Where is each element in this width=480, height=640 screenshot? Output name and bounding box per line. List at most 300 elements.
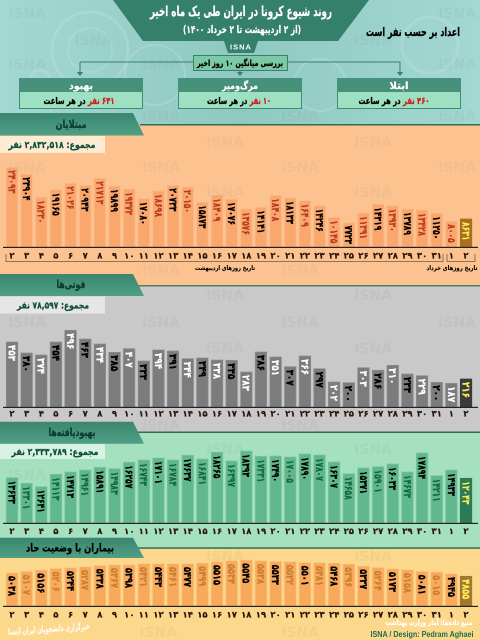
bar chart: infected bbox=[3, 167, 478, 248]
watermarks: ISNA bbox=[354, 442, 392, 458]
watermarks: ISNA bbox=[8, 468, 46, 484]
day labels: critical patients bbox=[9, 610, 469, 620]
bar chart: critical patients: ۵۵۳۳ bbox=[269, 565, 281, 585]
bar chart: critical patients: ۵۳۶۷ bbox=[108, 568, 120, 588]
card: infection: ابتلا bbox=[390, 81, 408, 92]
bar chart: recovered: ۱۶۲۵۷ bbox=[123, 465, 135, 489]
day labels: infected: ۲۱ bbox=[285, 252, 295, 262]
bar chart: infected: ۸۶۳۱ bbox=[459, 222, 471, 240]
bar chart: deaths: ۲۰۰ bbox=[342, 386, 354, 402]
day labels: deaths: ۲ bbox=[9, 410, 15, 420]
card: deaths: مرگ‌ومیر bbox=[221, 79, 258, 92]
bar chart: recovered: ۱۴۶۷۳ bbox=[401, 475, 413, 498]
bar chart: recovered: ۱۴۲۱۱ bbox=[430, 479, 442, 502]
day labels: deaths: ۲ bbox=[463, 410, 469, 420]
bar chart: critical patients: ۵۲۴۴ bbox=[64, 571, 76, 591]
card: deaths: ۱۰ نفر در هر ساعت bbox=[207, 96, 271, 107]
bar chart: deaths: ۳۸۵ bbox=[108, 355, 120, 372]
bar chart: recovered: ۱۴۹۶۱ bbox=[79, 473, 91, 496]
bar chart: recovered: ۱۷۶۳۷ bbox=[181, 458, 193, 482]
bar chart: infected: ۲۰۱۵۰ bbox=[181, 190, 193, 213]
bar chart: deaths: ۳۰۳ bbox=[357, 371, 369, 387]
day labels: critical patients: ۶ bbox=[68, 610, 73, 620]
day labels: critical patients: ۵ bbox=[53, 610, 59, 620]
bar chart: deaths: ۲۸۶ bbox=[372, 373, 384, 389]
watermarks: ISNA bbox=[206, 288, 244, 304]
bar chart: recovered: ۱۶۳۹۷ bbox=[225, 464, 237, 487]
bar chart: deaths: ۴۰۷ bbox=[123, 352, 135, 368]
bar chart: infected: ۱۵۸۷۳ bbox=[196, 205, 208, 229]
day labels: critical patients: ۱۵ bbox=[197, 610, 208, 620]
day labels: deaths: ۲۲ bbox=[300, 410, 311, 420]
day labels: critical patients: ۲ bbox=[463, 610, 469, 620]
day labels: deaths: ۷ bbox=[83, 410, 89, 420]
bar chart: infected: ۲۱۷۱۳ bbox=[93, 181, 105, 205]
bar chart: deaths: ۳۸۰ bbox=[20, 356, 32, 372]
day labels: infected: ۲۶ bbox=[358, 252, 369, 262]
bar chart: critical patients: ۵۵۱۵ bbox=[210, 565, 222, 585]
day labels: recovered: ۲ bbox=[463, 527, 469, 537]
bar chart: recovered: ۱۲۶۴۱ bbox=[35, 490, 47, 513]
card: infection: ۴۶۰ نفر در هر ساعت bbox=[358, 96, 429, 107]
day labels: critical patients: ۱۹ bbox=[256, 610, 267, 620]
day labels: infected: ۱۹ bbox=[256, 252, 267, 262]
day labels: deaths: ۲۶ bbox=[358, 410, 369, 420]
bar chart: infected: ۷۷۲۳ bbox=[342, 226, 354, 244]
day labels: deaths: ۴ bbox=[39, 410, 44, 420]
day labels: deaths: ۳۱ bbox=[432, 410, 442, 420]
bar chart: deaths: ۲۱۶ bbox=[459, 382, 471, 398]
bar chart: infected: ۱۳۵۷۶ bbox=[240, 212, 252, 235]
day labels: infected: ۲۲ bbox=[300, 252, 311, 262]
bar chart: deaths: ۳۵۱ bbox=[269, 360, 281, 376]
panel: deaths bbox=[0, 274, 480, 432]
bar chart: critical patients: ۵۵۰۱ bbox=[298, 566, 310, 586]
day labels: infected: ۲۰ bbox=[270, 252, 281, 262]
bar chart: critical patients: ۵۴۹۹ bbox=[196, 566, 208, 587]
day labels: deaths: ۱۹ bbox=[256, 410, 267, 420]
header background bbox=[0, 0, 480, 126]
bar chart: recovered: ۱۳۶۳۳ bbox=[5, 481, 17, 504]
bar chart: infected: ۱۹۳۷۲ bbox=[123, 192, 135, 215]
watermarks: ISNA bbox=[438, 6, 476, 22]
bar chart: infected: ۲۰۷۳۳ bbox=[166, 188, 178, 212]
day labels: critical patients: ۲۱ bbox=[285, 610, 295, 620]
bar chart: critical patients: ۵۳۹۸ bbox=[123, 568, 135, 588]
day labels: infected: ۱۶ bbox=[212, 252, 222, 262]
watermarks: ISNA bbox=[206, 185, 244, 201]
bar chart: critical patients: ۵۰۱۵ bbox=[430, 575, 442, 596]
bar chart: critical patients: ۵۴۶۸ bbox=[328, 566, 340, 587]
day labels: critical patients: ۷ bbox=[83, 610, 89, 620]
day labels: recovered: ۱۳ bbox=[168, 527, 179, 537]
bar chart: recovered: ۱۴۱۱۳ bbox=[49, 477, 61, 501]
watermarks: ISNA bbox=[438, 57, 476, 73]
bar chart: deaths: ۳۳۵ bbox=[225, 363, 237, 380]
day labels: infected: ۲۴ bbox=[329, 252, 339, 262]
day labels: infected bbox=[9, 252, 469, 262]
bar chart: infected: ۱۶۴۰۹ bbox=[298, 204, 310, 227]
total: deaths: مجموع: ۷۸,۵۹۷ نفر bbox=[16, 300, 89, 312]
bar chart: deaths: ۲۹۷ bbox=[313, 372, 325, 388]
bar chart: recovered: ۱۷۸۹۰ bbox=[298, 457, 310, 480]
bar chart: infected: ۱۱۳۹۱ bbox=[357, 216, 369, 239]
panel: critical patients bbox=[0, 538, 480, 640]
bar chart: recovered: ۱۴۹۸۳ bbox=[108, 472, 120, 495]
day labels: deaths: ۱۳ bbox=[168, 410, 179, 420]
bar chart: critical patients: ۵۲۰۶ bbox=[49, 572, 61, 592]
day labels: deaths: ۲۱ bbox=[285, 410, 295, 420]
bar chart: deaths: ۳۹۱ bbox=[166, 354, 178, 370]
bar chart: recovered: ۱۶۷۴۳ bbox=[137, 463, 149, 486]
day labels: critical patients: ۱۶ bbox=[212, 610, 222, 620]
panel: recovered bbox=[0, 422, 480, 548]
day labels: infected: ۲۸ bbox=[388, 252, 399, 262]
day labels: deaths: ۱۱ bbox=[139, 410, 149, 420]
day labels: recovered: ۱۰ bbox=[124, 527, 134, 537]
total: deaths bbox=[0, 296, 105, 314]
day labels: infected: ۲۳ bbox=[314, 252, 325, 262]
bar chart: critical patients: ۵۳۳۷ bbox=[357, 569, 369, 590]
day labels: deaths: ۱۴ bbox=[183, 410, 193, 420]
bar chart: infected: ۱۸۴۰۸ bbox=[269, 198, 281, 222]
bar chart: critical patients: ۵۴۶۱ bbox=[166, 567, 178, 587]
logo: ISNA Persian: خبرگزاری دانشجویان ایران ایسنا bbox=[7, 620, 90, 638]
bar chart: infected: ۱۹۱۶۵ bbox=[49, 193, 61, 216]
bar chart: critical patients: ۵۱۰۷ bbox=[20, 575, 32, 595]
day labels: recovered: ۱ bbox=[449, 527, 454, 537]
day labels: infected: ۱۵ bbox=[197, 252, 208, 262]
watermarks: ISNA bbox=[281, 315, 319, 331]
total: infected bbox=[0, 136, 105, 153]
day labels: infected: ۱۴ bbox=[183, 252, 193, 262]
day labels: recovered: ۲۹ bbox=[402, 527, 413, 537]
card: recovery: بهبود bbox=[69, 81, 93, 92]
watermarks: ISNA bbox=[354, 185, 392, 201]
watermarks: ISNA bbox=[8, 160, 46, 176]
day labels: infected: ۲ bbox=[463, 252, 469, 262]
bar chart: deaths: ۳۴۹ bbox=[196, 361, 208, 377]
total: recovered bbox=[0, 444, 105, 459]
bar chart: recovered: ۱۵۳۷۱ bbox=[357, 471, 369, 494]
day labels: infected: ۲۷ bbox=[373, 252, 384, 262]
month brackets bbox=[6, 254, 475, 262]
day labels: critical patients: ۲۰ bbox=[270, 610, 281, 620]
day labels: critical patients: ۱۷ bbox=[227, 610, 238, 620]
bar chart: infected: ۱۳۷۸۹ bbox=[401, 212, 413, 235]
watermarks: ISNA bbox=[281, 468, 319, 484]
day labels: recovered: ۱۵ bbox=[197, 527, 208, 537]
day labels: recovered: ۲۷ bbox=[373, 527, 384, 537]
bar chart: recovered bbox=[3, 451, 478, 524]
bar chart: deaths: ۲۸۳ bbox=[240, 375, 252, 391]
day labels: critical patients: ۲۳ bbox=[314, 610, 325, 620]
day labels: critical patients: ۳۱ bbox=[432, 610, 442, 620]
day labels: critical patients: ۳ bbox=[24, 610, 30, 620]
bar chart: infected: ۱۰۱۴۵ bbox=[328, 220, 340, 244]
bar chart: recovered: ۱۷۰۰۵ bbox=[284, 460, 296, 483]
watermarks: ISNA bbox=[354, 33, 392, 49]
heading: infected bbox=[0, 113, 144, 136]
day labels: infected: ۲۵ bbox=[344, 252, 354, 262]
bar chart: infected: ۲۰۹۴۳ bbox=[79, 188, 91, 212]
day labels: infected: ۳۰ bbox=[417, 252, 427, 262]
bar chart: infected: ۸۰۰۵ bbox=[445, 224, 457, 243]
bar chart: critical patients: ۵۰۸۱ bbox=[416, 575, 428, 595]
day labels: recovered: ۲۸ bbox=[388, 527, 399, 537]
day labels: recovered: ۶ bbox=[68, 527, 73, 537]
watermarks: ISNA bbox=[8, 315, 46, 331]
watermarks: ISNA bbox=[142, 418, 180, 434]
heading: critical patients: بیماران با وضعیت حاد bbox=[26, 542, 114, 554]
bar chart: critical patients: ۵۵۲۲ bbox=[284, 565, 296, 585]
day labels: deaths: ۱۷ bbox=[227, 410, 238, 420]
bar chart: recovered: ۱۷۱۰۱ bbox=[152, 461, 164, 484]
day labels: deaths: ۹ bbox=[112, 410, 118, 420]
bar chart: critical patients: ۵۵۳۴ bbox=[225, 564, 237, 584]
bar chart: deaths: ۴۵۴ bbox=[49, 345, 61, 361]
bar chart: recovered: ۱۲۰۴۳ bbox=[459, 481, 471, 505]
bar chart: recovered: ۱۶۷۸۴ bbox=[166, 463, 178, 486]
day labels: deaths: ۲۹ bbox=[402, 410, 413, 420]
watermarks: ISNA bbox=[142, 263, 180, 279]
card: recovery: ۶۴۱ نفر در هر ساعت bbox=[44, 96, 114, 107]
bar chart: critical patients: ۵۴۲۱ bbox=[137, 567, 149, 587]
bar chart: recovered: ۱۶۰۳۳ bbox=[386, 467, 398, 490]
day labels: deaths bbox=[9, 410, 469, 420]
day labels: infected: ۳۱ bbox=[432, 252, 442, 262]
bar chart: critical patients: ۴۸۵۵ bbox=[459, 579, 471, 600]
bar chart: critical patients: ۵۴۴۳ bbox=[152, 567, 164, 587]
day labels: critical patients: ۲۴ bbox=[329, 610, 339, 620]
bar chart: deaths: ۴۳۴ bbox=[93, 347, 105, 363]
bar chart: recovered: ۱۷۸۹۴ bbox=[416, 456, 428, 479]
connector arrows bbox=[77, 62, 403, 76]
average label box: بررسی میانگین ۱۰ روز اخیر bbox=[196, 58, 283, 69]
bar chart: infected: ۱۷۰۸۰ bbox=[137, 202, 149, 225]
day labels: deaths: ۲۴ bbox=[329, 410, 339, 420]
ISNA tab: ISNA bbox=[230, 42, 252, 52]
bar chart: critical patients: ۴۹۴۵ bbox=[445, 577, 457, 597]
total: infected: مجموع: ۲,۸۳۲,۵۱۸ نفر bbox=[8, 140, 96, 151]
watermarks: ISNA bbox=[354, 549, 392, 565]
bar chart: deaths: ۳۸۶ bbox=[254, 355, 266, 371]
watermarks: ISNA bbox=[281, 418, 319, 434]
day labels: recovered: ۳۱ bbox=[432, 527, 442, 537]
day labels: deaths: ۵ bbox=[53, 410, 59, 420]
bar chart: recovered: ۱۷۸۰۷ bbox=[313, 458, 325, 481]
day labels: infected: ۹ bbox=[112, 252, 118, 262]
bar chart: recovered: ۱۴۹۳۳ bbox=[445, 473, 457, 496]
day labels: critical patients: ۲۵ bbox=[344, 610, 354, 620]
watermarks: ISNA bbox=[142, 57, 180, 73]
day labels: critical patients: ۲۸ bbox=[388, 610, 399, 620]
day labels: recovered: ۱۴ bbox=[183, 527, 193, 537]
bar chart: deaths: ۳۴۴ bbox=[181, 362, 193, 378]
watermarks: ISNA bbox=[354, 341, 392, 357]
bar chart: deaths: ۲۲۹ bbox=[416, 379, 428, 395]
bar chart: infected: ۱۳۹۳۰ bbox=[386, 209, 398, 232]
title: روند شیوع کرونا در ایران طی یک ماه اخیر bbox=[149, 4, 332, 20]
day labels: critical patients: ۱۲ bbox=[153, 610, 164, 620]
day labels: critical patients: ۱۱ bbox=[139, 610, 149, 620]
day labels: critical patients: ۲۹ bbox=[402, 610, 413, 620]
bar chart: critical patients: ۵۴۸۱ bbox=[313, 566, 325, 586]
day labels: infected: ۴ bbox=[39, 252, 44, 262]
day labels: infected: ۱۲ bbox=[153, 252, 164, 262]
day labels: deaths: ۱۶ bbox=[212, 410, 222, 420]
bar chart: deaths: ۳۷۴ bbox=[35, 358, 47, 374]
day labels: recovered: ۹ bbox=[112, 527, 118, 537]
heading: deaths bbox=[0, 274, 144, 296]
watermarks: ISNA bbox=[8, 57, 46, 73]
day labels: infected: ۵ bbox=[53, 252, 59, 262]
bar chart: critical patients: ۵۵۳۸ bbox=[254, 564, 266, 584]
day labels: infected: ۲ bbox=[9, 252, 15, 262]
panel: infected bbox=[0, 113, 480, 285]
card: infection bbox=[337, 78, 461, 108]
bar chart: infected: ۲۱۰۲۶ bbox=[64, 186, 76, 209]
day labels: recovered: ۳۰ bbox=[417, 527, 427, 537]
day labels: critical patients: ۱۸ bbox=[241, 610, 252, 620]
day labels: deaths: ۲۷ bbox=[373, 410, 384, 420]
day labels: critical patients: ۹ bbox=[112, 610, 118, 620]
heading: critical patients bbox=[0, 538, 144, 558]
bar chart: recovered: ۱۴۷۱۳ bbox=[64, 475, 76, 498]
day labels: critical patients: ۲۲ bbox=[300, 610, 311, 620]
day labels: infected: ۸ bbox=[97, 252, 103, 262]
bar chart: recovered: ۱۷۴۹۰ bbox=[269, 459, 281, 482]
day labels: infected: ۱۷ bbox=[227, 252, 238, 262]
day labels: infected: ۳ bbox=[24, 252, 30, 262]
day labels: recovered: ۴ bbox=[39, 527, 44, 537]
bar chart: infected: ۲۴۰۹۳ bbox=[5, 170, 17, 194]
day labels: infected: ۶ bbox=[68, 252, 73, 262]
bar chart: infected: ۱۸۱۳۳ bbox=[284, 201, 296, 224]
watermarks: ISNA bbox=[354, 288, 392, 304]
watermarks: ISNA bbox=[142, 109, 180, 125]
day labels: deaths: ۱۸ bbox=[241, 410, 252, 420]
bar chart: critical patients bbox=[3, 560, 478, 607]
day labels: deaths: ۶ bbox=[68, 410, 73, 420]
day labels: infected: ۷ bbox=[83, 252, 89, 262]
day labels: infected: ۱ bbox=[449, 252, 454, 262]
bar chart: deaths: ۲۰۲ bbox=[328, 385, 340, 401]
decorative virus shapes bbox=[30, 12, 458, 111]
bar chart: deaths: ۳۰۷ bbox=[284, 370, 296, 386]
day labels: deaths: ۲۸ bbox=[388, 410, 399, 420]
day labels: recovered: ۱۶ bbox=[212, 527, 222, 537]
bar chart: critical patients: ۵۱۷۳ bbox=[386, 572, 398, 592]
bar chart: recovered: ۱۷۳۳۱ bbox=[254, 459, 266, 482]
watermarks: ISNA bbox=[142, 315, 180, 331]
bar chart: deaths: ۱۸۷ bbox=[445, 386, 457, 403]
bar chart: recovered: ۱۸۲۶۵ bbox=[210, 455, 222, 479]
ISNA tab bbox=[224, 41, 258, 53]
watermarks: ISNA bbox=[206, 341, 244, 357]
title banner bbox=[113, 0, 369, 53]
day labels: infected: ۱۰ bbox=[124, 252, 134, 262]
bar chart: critical patients: ۵۲۸۷ bbox=[79, 570, 91, 590]
bar chart: critical patients: ۵۳۳۸ bbox=[93, 569, 105, 589]
bar chart: deaths: ۳۳۳ bbox=[137, 364, 149, 380]
bar chart: deaths: ۲۳۳ bbox=[401, 377, 413, 393]
watermarks: ISNA bbox=[281, 160, 319, 176]
watermarks: ISNA bbox=[438, 315, 476, 331]
day labels: deaths: ۸ bbox=[97, 410, 103, 420]
bar chart: infected: ۱۸۴۰۹ bbox=[210, 198, 222, 222]
day labels: critical patients: ۲۶ bbox=[358, 610, 369, 620]
heading: recovered bbox=[0, 422, 144, 444]
bar chart: deaths: ۲۰۰ bbox=[430, 385, 442, 401]
day labels: recovered: ۲۲ bbox=[300, 527, 311, 537]
bar chart: infected: ۱۳۴۲۸ bbox=[416, 213, 428, 236]
watermarks: ISNA bbox=[438, 109, 476, 125]
day labels: recovered: ۱۸ bbox=[241, 527, 252, 537]
watermarks: ISNA bbox=[206, 549, 244, 565]
day labels: recovered: ۲۱ bbox=[285, 527, 295, 537]
bar chart: deaths: ۳۱۰ bbox=[386, 368, 398, 384]
bar chart: deaths: ۳۳۸ bbox=[210, 363, 222, 379]
bar chart: infected: ۱۴۲۴۶ bbox=[313, 209, 325, 232]
day labels: deaths: ۱۵ bbox=[197, 410, 208, 420]
day labels: recovered: ۷ bbox=[83, 527, 89, 537]
day labels: deaths: ۳ bbox=[24, 410, 30, 420]
bar chart: recovered: ۱۳۳۰۱ bbox=[20, 486, 32, 509]
day labels: critical patients: ۴ bbox=[39, 610, 44, 620]
total: recovered: مجموع: ۲,۳۳۳,۷۸۹ نفر bbox=[11, 447, 99, 458]
day labels: recovered: ۱۱ bbox=[139, 527, 149, 537]
watermarks: ISNA bbox=[438, 160, 476, 176]
day labels: deaths: ۲۰ bbox=[270, 410, 281, 420]
day labels: critical patients: ۳۰ bbox=[417, 610, 427, 620]
card: deaths bbox=[178, 78, 302, 108]
day labels: recovered: ۸ bbox=[97, 527, 103, 537]
day labels: infected: ۱۸ bbox=[241, 252, 252, 262]
bar chart: critical patients: ۵۲۶۴ bbox=[372, 571, 384, 591]
bar chart: infected: ۱۹۸۹۹ bbox=[108, 189, 120, 212]
heading: infected: مبتلایان bbox=[56, 118, 86, 131]
watermarks: ISNA bbox=[354, 135, 392, 151]
day labels: deaths: ۱۰ bbox=[124, 410, 134, 420]
bar chart: deaths: ۴۵۳ bbox=[5, 345, 17, 361]
bar chart: deaths bbox=[3, 330, 478, 408]
bar chart: critical patients: ۵۳۹۶ bbox=[342, 567, 354, 587]
day labels: critical patients: ۱۴ bbox=[183, 610, 193, 620]
bar chart: deaths: ۳۶۶ bbox=[298, 359, 310, 375]
day labels: critical patients: ۲۷ bbox=[373, 610, 384, 620]
day labels: critical patients: ۸ bbox=[97, 610, 103, 620]
average label box bbox=[194, 56, 288, 70]
day labels: recovered: ۳ bbox=[24, 527, 30, 537]
watermarks: ISNA bbox=[74, 33, 112, 49]
day labels: recovered: ۱۲ bbox=[153, 527, 164, 537]
bar chart: recovered: ۱۶۸۴۱ bbox=[196, 462, 208, 485]
heading: deaths: فوتی‌ها bbox=[56, 278, 86, 291]
bar chart: infected: ۱۸۲۳۰ bbox=[35, 200, 47, 223]
day labels: infected: ۲۹ bbox=[402, 252, 413, 262]
bar chart: recovered: ۱۶۳۰۷ bbox=[328, 465, 340, 488]
watermarks: ISNA bbox=[281, 109, 319, 125]
day labels: recovered: ۲۳ bbox=[314, 527, 325, 537]
day labels: recovered: ۵ bbox=[53, 527, 59, 537]
day labels: recovered: ۱۹ bbox=[256, 527, 267, 537]
day labels: recovered: ۲۴ bbox=[329, 527, 339, 537]
watermarks: ISNA bbox=[8, 6, 46, 22]
day labels: recovered: ۲۵ bbox=[344, 527, 354, 537]
watermarks: ISNA bbox=[206, 135, 244, 151]
bar chart: recovered: ۱۴۶۵۸ bbox=[342, 477, 354, 500]
